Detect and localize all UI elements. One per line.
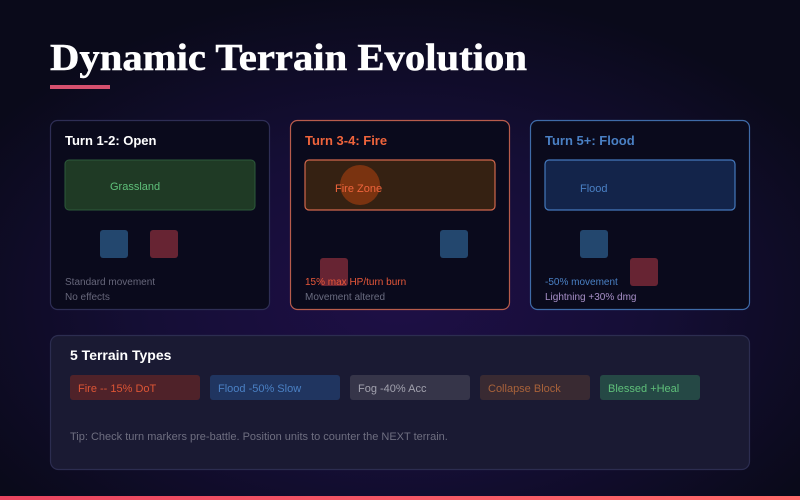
badge: collapse	[480, 375, 590, 400]
heading: terrain types: 5 Terrain Types	[70, 347, 172, 363]
title: Dynamic Terrain Evolution	[50, 37, 527, 79]
heading: Turn 1-2: Turn 1-2: Open	[65, 133, 157, 148]
panel: 5 Terrain Types	[50, 336, 750, 470]
ally unit	[580, 230, 608, 258]
badge: fog: Fog -40% Acc	[358, 383, 427, 395]
badge: blessed	[600, 375, 700, 400]
panel: Turn 3-4 Fire: Movement altered	[305, 292, 385, 303]
ally unit	[100, 230, 128, 258]
badge: blessed: Blessed +Heal	[608, 383, 679, 395]
enemy unit	[630, 258, 658, 286]
tip text: Tip: Check turn markers pre-battle. Position units to counter the NEXT terrain.	[70, 431, 448, 443]
title underline accent	[50, 85, 110, 89]
panel: Turn 3-4 Fire	[290, 120, 510, 310]
ally unit	[440, 230, 468, 258]
panel: Turn 5+ Flood	[530, 120, 750, 310]
terrain zone: grassland	[65, 160, 255, 210]
terrain zone: flood	[545, 160, 735, 210]
terrain zone: grassland: Grassland	[110, 181, 160, 193]
panel: Turn 1-2 Open	[50, 120, 270, 310]
badge: fire: Fire -- 15% DoT	[78, 383, 157, 395]
badge: collapse: Collapse Block	[488, 383, 561, 395]
heading: Turn 5+: Turn 5+: Flood	[545, 133, 635, 148]
badge: flood: Flood -50% Slow	[218, 383, 301, 395]
badge: flood	[210, 375, 340, 400]
effects text	[65, 277, 155, 303]
terrain zone: flood: Flood	[580, 183, 608, 195]
badge: fire	[70, 375, 200, 400]
terrain zone: fire: Fire Zone	[335, 183, 382, 195]
terrain zone: fire	[305, 160, 495, 210]
panel: Turn 5+ Flood: Lightning +30% dmg	[545, 292, 636, 303]
badge: fog	[350, 375, 470, 400]
effects text: No effects	[65, 292, 110, 303]
fire burst circle	[340, 165, 380, 205]
bottom accent bar	[0, 496, 800, 500]
effects text: Standard movement	[65, 277, 155, 288]
effects text: 15% max HP/turn burn	[305, 277, 406, 288]
effects text: -50% movement	[545, 277, 618, 288]
enemy unit	[150, 230, 178, 258]
enemy unit	[320, 258, 348, 286]
heading: Turn 3-4: Turn 3-4: Fire	[305, 133, 387, 148]
